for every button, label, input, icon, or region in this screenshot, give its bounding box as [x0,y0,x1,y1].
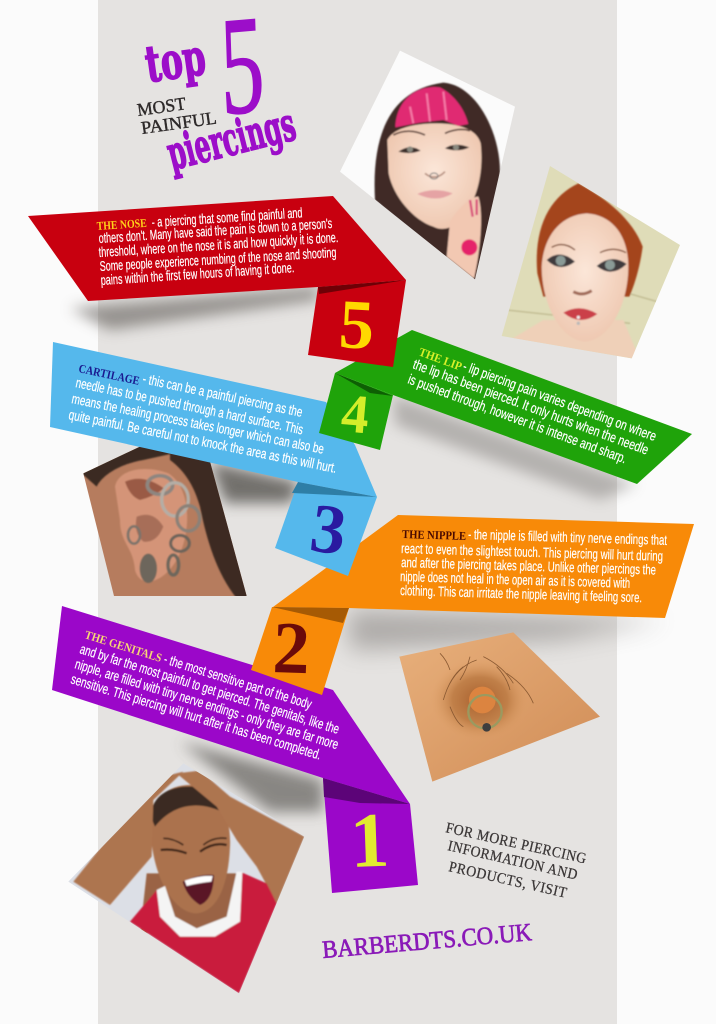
number tab [308,280,406,367]
ribbon body [50,342,377,497]
text block: quite painful. Be careful not to knock the area as this will hurt. [67,406,338,476]
text block [67,361,338,476]
title block [136,0,301,181]
panel: 1 the genitals [52,606,418,893]
text block [69,628,342,763]
text block: sensitive. This piercing will hurt after it has been completed. [69,671,323,763]
photo: pierced nipple [399,632,600,782]
text block: CARTILAGE [77,361,141,388]
panel: 5 the nose [28,196,406,367]
subtitle: most painful [136,93,218,138]
photo: woman with red hair and lip piercing [502,166,680,360]
number tab [275,482,377,576]
text block: THE NOSE [96,216,147,233]
text block: is pushed through, however it is intense and sharp. [406,371,629,466]
fold shadow [292,482,377,497]
text block [406,345,659,466]
photo: man clutching his head in pain [68,763,304,993]
central grey band [98,0,617,1024]
text block: means the healing process takes longer which can also be [70,390,326,457]
number 2: 2 [271,607,311,690]
fold shadow [318,280,406,294]
title word: piercings: piercings [162,97,301,181]
number 5: 5 [337,286,376,365]
text block: - a piercing that some find painful and [151,204,303,230]
number tab [251,607,349,695]
text block: THE GENITALS [83,628,164,665]
text block [400,526,667,605]
text block: THE LIP [417,345,464,373]
ribbon body [52,606,410,804]
photo: woman with pink fringe and nose ring [340,51,515,282]
title word: top: top [141,27,209,94]
footer: call to action: INFORMATION AND [446,838,579,884]
fold shadow [272,607,349,623]
ribbon shadows [70,287,665,812]
text block: THE NIPPLE [402,527,466,543]
photo: ear with cartilage piercings [82,445,250,598]
text block: and by far the most painful to get pierced. The genitals, like the [78,641,342,737]
text block: pains within the first few hours of having it done. [100,259,295,288]
number 3: 3 [306,490,351,571]
ribbon body [273,515,694,618]
panel: 2 the nipple [251,515,694,695]
text block: others don't. Many have said the pain is down to a person's [98,215,333,246]
text block: - this can be a painful piercing as the [141,370,304,420]
number tab [323,778,418,893]
footer: website: BARBERDTS.CO.UK [321,919,533,964]
panel: 3 cartilage [50,342,377,576]
footer: call to action: PRODUCTS, VISIT [447,859,569,902]
number tab [319,373,393,450]
text block: threshold, where on the nose it is and how quickly it is done. [98,229,339,260]
footer: call to action [444,820,588,902]
ribbon body [335,330,692,484]
number 1: 1 [349,796,391,884]
number 4: 4 [339,382,372,445]
text block: - the most sensitive part of the body [162,651,314,712]
footer: call to action: FOR MORE PIERCING [444,820,588,868]
subtitle: most painful: MOST [136,93,187,120]
text block: needle has to be pushed through a hard surface. This [74,374,305,437]
panel: 4 the lip [319,330,692,484]
ribbon body [28,196,406,301]
subtitle: most painful: PAINFUL [140,108,218,138]
fold shadow [323,778,410,804]
fold shadow [335,373,393,396]
text block: nipple, are filled with tiny nerve endings - only they are far more [73,656,341,752]
text block [96,204,339,288]
text block: Some people experience numbing of the nose and shooting [99,244,337,274]
